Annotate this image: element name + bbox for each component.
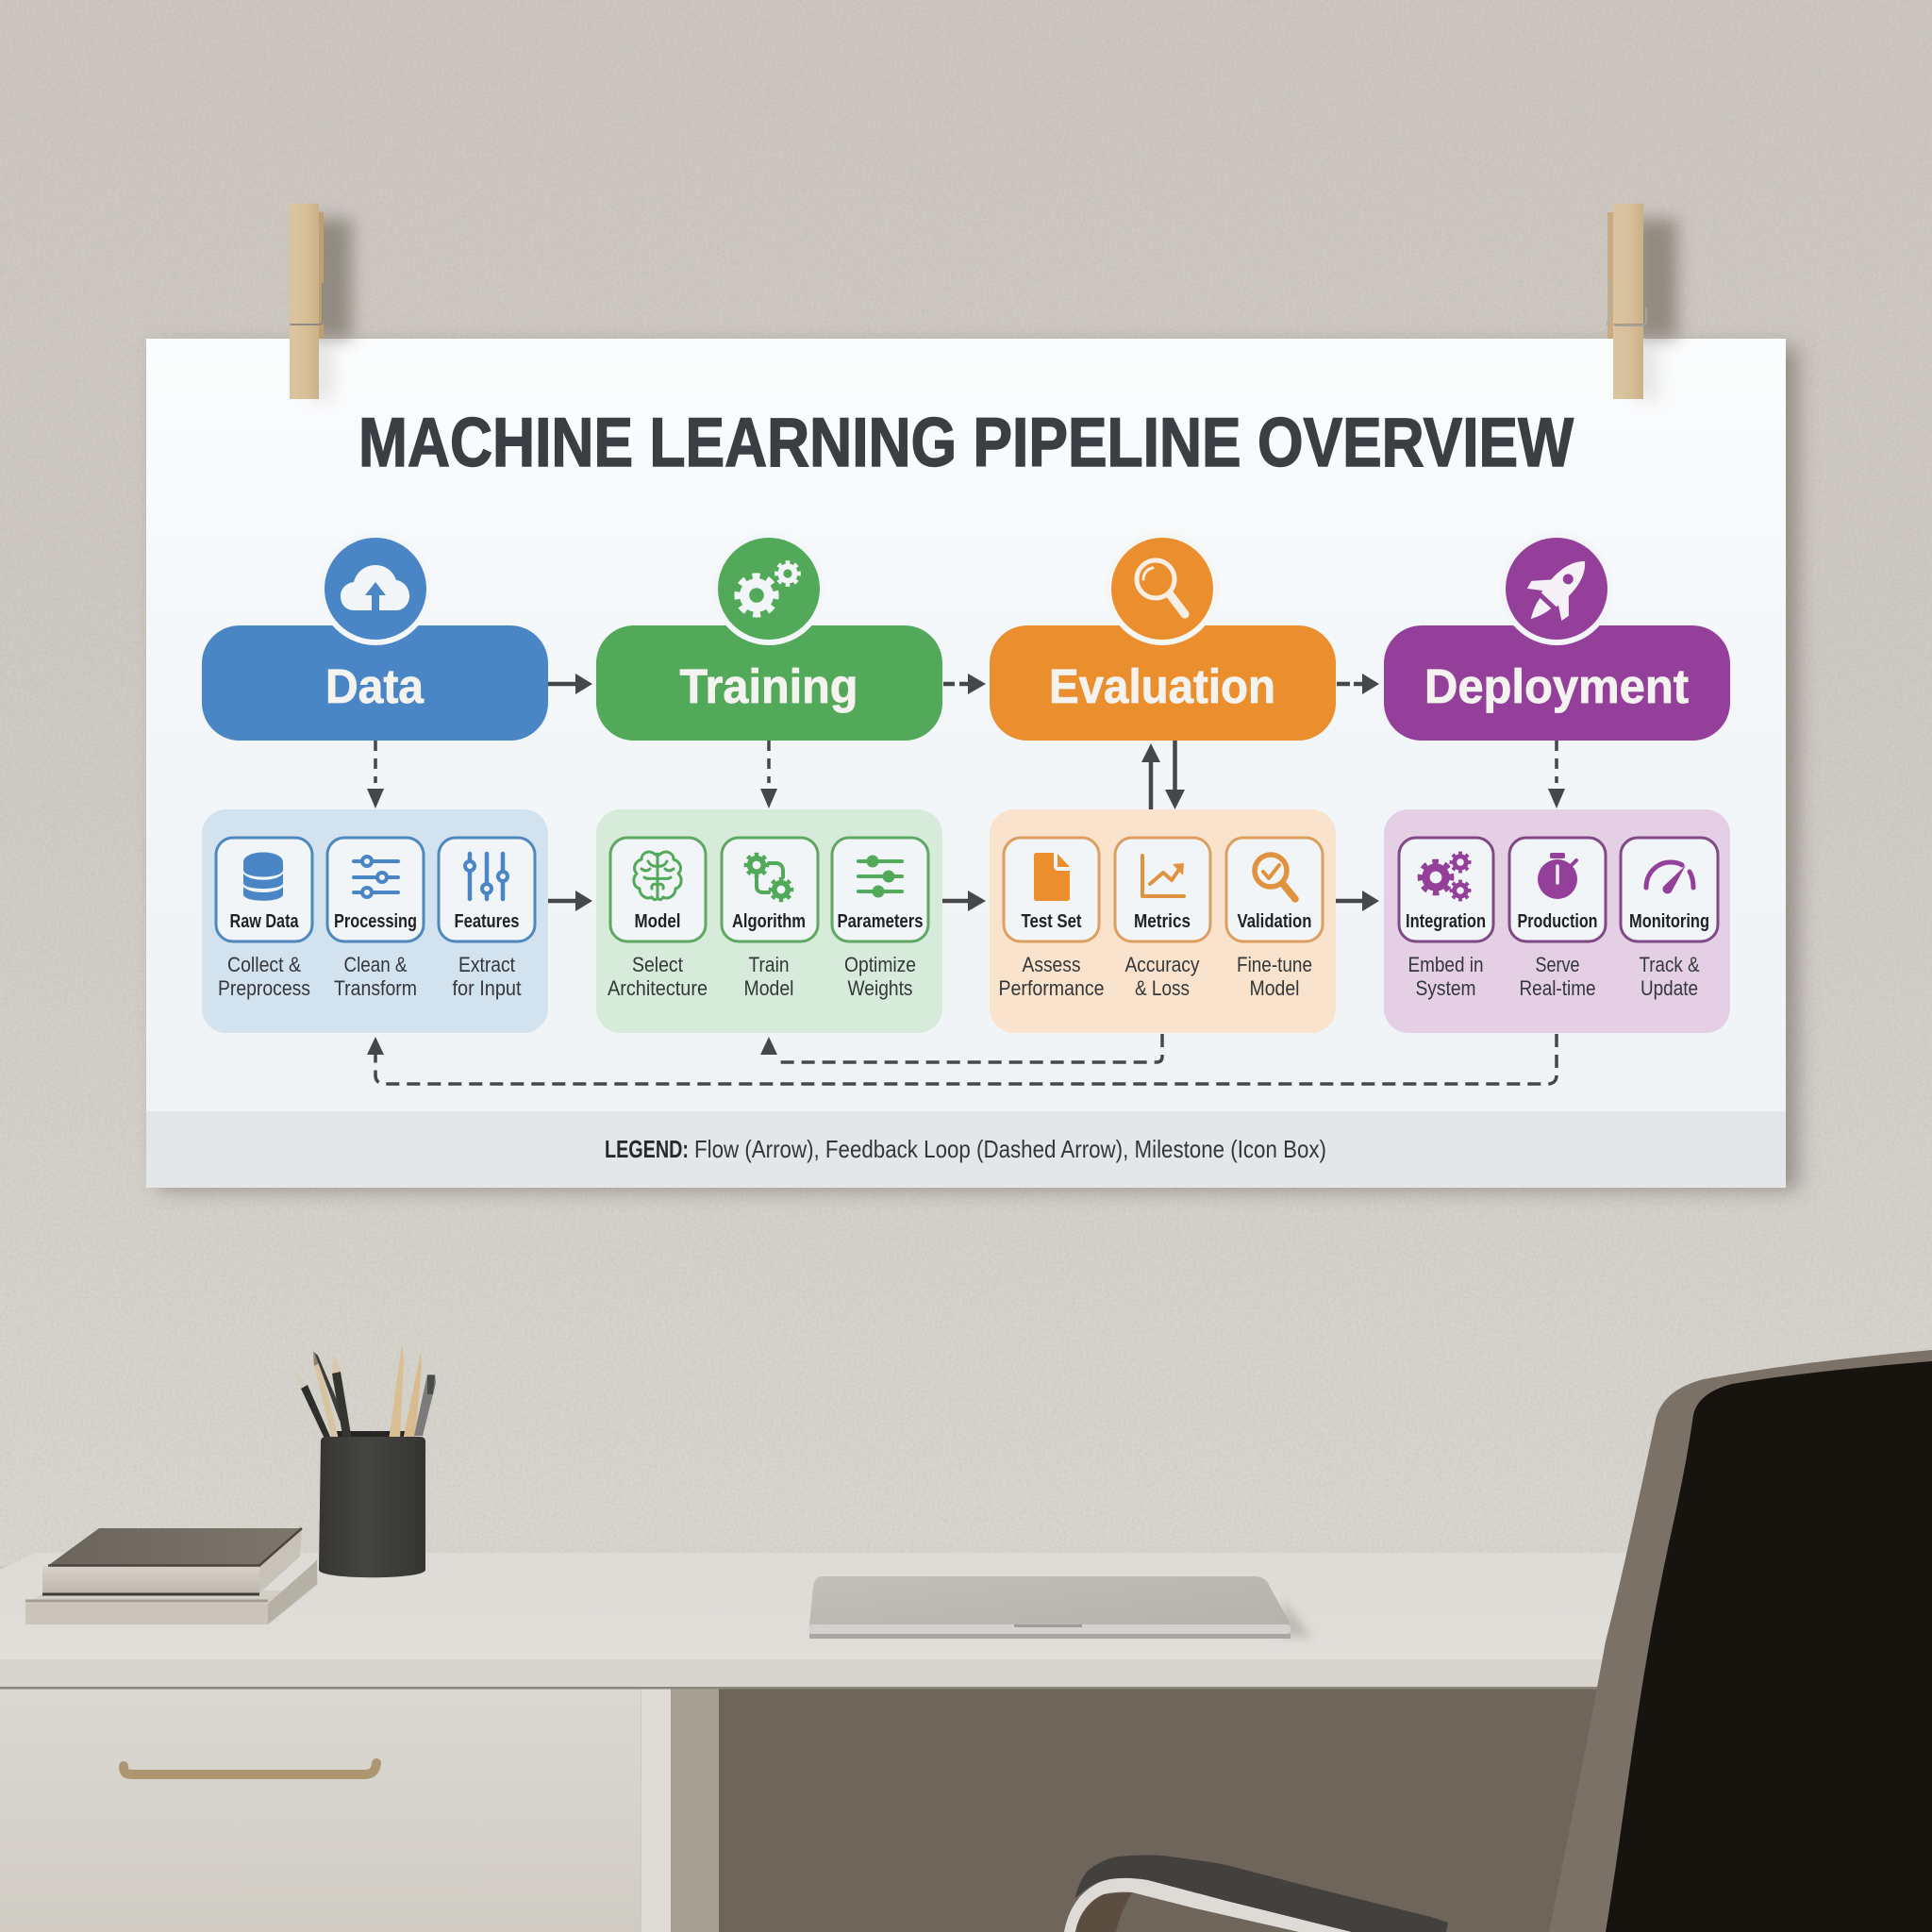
captions: evaluation: Assess — [1023, 953, 1081, 976]
captions: deployment: Embed in — [1407, 953, 1483, 976]
card: test set: Test Set — [1021, 911, 1082, 932]
card: algorithm: Algorithm — [732, 911, 806, 932]
feedback loop: evaluation to training — [760, 1034, 1162, 1062]
stage header: training — [596, 532, 942, 741]
captions: data: Transform — [334, 976, 417, 1000]
captions: data: Preprocess — [218, 976, 310, 1000]
captions: deployment: Serve — [1536, 953, 1579, 976]
captions: evaluation: Accuracy — [1124, 953, 1200, 976]
arrow: data to training — [548, 674, 592, 694]
captions: data — [218, 953, 521, 1000]
office chair — [1064, 1350, 1932, 1932]
panel: training — [596, 809, 942, 1033]
icon: magnifier — [1137, 560, 1185, 614]
arrow: deployment header to panel — [1548, 741, 1565, 808]
pencil cup — [293, 1344, 436, 1577]
captions: data: Extract — [458, 953, 515, 976]
captions: deployment: System — [1415, 976, 1475, 1000]
captions: data: for Input — [453, 976, 521, 1000]
stage header: training: Training — [679, 659, 858, 713]
captions: evaluation: & Loss — [1135, 976, 1190, 1000]
stage header: data — [202, 532, 548, 741]
captions: training — [608, 953, 916, 1000]
card: raw data: Raw Data — [230, 911, 299, 932]
arrow: evaluation to deployment — [1337, 674, 1379, 694]
card: processing: Processing — [334, 911, 417, 932]
card: model — [610, 838, 706, 941]
captions: training: Optimize — [844, 953, 916, 976]
panel: evaluation — [990, 809, 1336, 1033]
card: monitoring: Monitoring — [1629, 911, 1709, 932]
icon: connected gears — [746, 855, 791, 900]
stage header: deployment: Deployment — [1424, 659, 1689, 713]
arrow: data panel to training panel — [548, 891, 592, 911]
pencils — [293, 1344, 436, 1441]
card: parameters: Parameters — [838, 911, 923, 932]
arrow: data header to panel — [367, 741, 384, 808]
legend band: Flow (Arrow), Feedback Loop (Dashed Arrow), Milestone (Icon Box) — [694, 1135, 1326, 1163]
stage header: data: Data — [325, 659, 425, 713]
icon: brain — [634, 852, 681, 900]
captions: training: Model — [743, 976, 794, 1000]
captions: data: Collect & — [227, 953, 301, 976]
legend band — [146, 1111, 1786, 1188]
card: test set — [1004, 838, 1099, 941]
captions: deployment: Track & — [1640, 953, 1700, 976]
arrow: training to evaluation — [943, 674, 986, 694]
icon: cloud upload — [341, 565, 409, 610]
drawer handle — [124, 1763, 376, 1774]
icon: rocket — [1512, 543, 1604, 637]
card: metrics: Metrics — [1134, 911, 1191, 932]
card: metrics — [1115, 838, 1210, 941]
captions: evaluation: Model — [1249, 976, 1300, 1000]
card: validation: Validation — [1238, 911, 1311, 932]
card: raw data — [216, 838, 312, 941]
poster shadow — [158, 347, 1798, 1190]
card: parameters — [832, 838, 928, 941]
clothespin: left — [290, 204, 352, 399]
desk — [0, 1553, 1641, 1932]
books — [25, 1528, 318, 1624]
card: features — [439, 838, 535, 941]
card: processing — [327, 838, 424, 941]
captions: deployment — [1407, 953, 1700, 1000]
arrow: evaluation panel to deployment panel — [1336, 891, 1379, 911]
stage header: deployment — [1384, 532, 1730, 741]
captions: data: Clean & — [343, 953, 408, 976]
chair armrest — [1064, 1855, 1448, 1932]
captions: training: Weights — [847, 976, 913, 1000]
captions: evaluation — [998, 953, 1312, 1000]
stage header: evaluation: Evaluation — [1049, 659, 1275, 713]
captions: deployment: Real-time — [1519, 976, 1596, 1000]
arrow: training panel to evaluation panel — [942, 891, 986, 911]
card: features: Features — [455, 911, 519, 932]
arrow: evaluation panel up to header — [1141, 743, 1160, 809]
card: model: Model — [634, 911, 681, 932]
arrow: evaluation header down to panel — [1165, 741, 1185, 809]
captions: training: Architecture — [608, 976, 708, 1000]
panel: data — [202, 809, 548, 1033]
captions: training: Train — [749, 953, 789, 976]
arrow: training header to panel — [760, 741, 777, 808]
card: integration — [1399, 838, 1493, 941]
icon: three gears — [1420, 853, 1470, 900]
captions: evaluation: Fine-tune — [1237, 953, 1312, 976]
card: validation — [1226, 838, 1323, 941]
feedback loop: deployment to data — [367, 1034, 1557, 1084]
card: production: Production — [1517, 911, 1598, 932]
captions: evaluation: Performance — [998, 976, 1104, 1000]
icon: gears — [738, 562, 799, 614]
title: MACHINE LEARNING PIPELINE OVERVIEW — [358, 405, 1574, 481]
card: integration: Integration — [1406, 911, 1486, 932]
card: production — [1509, 838, 1606, 941]
stage header: evaluation — [990, 532, 1336, 741]
card: algorithm — [722, 838, 818, 941]
panel: deployment — [1384, 809, 1730, 1033]
legend band: LEGEND: — [605, 1135, 689, 1163]
poster — [146, 339, 1786, 1188]
laptop — [809, 1576, 1311, 1639]
captions: deployment: Update — [1641, 976, 1698, 1000]
card: monitoring — [1621, 838, 1718, 941]
clothespin: right — [1607, 204, 1677, 399]
captions: training: Select — [632, 953, 683, 976]
